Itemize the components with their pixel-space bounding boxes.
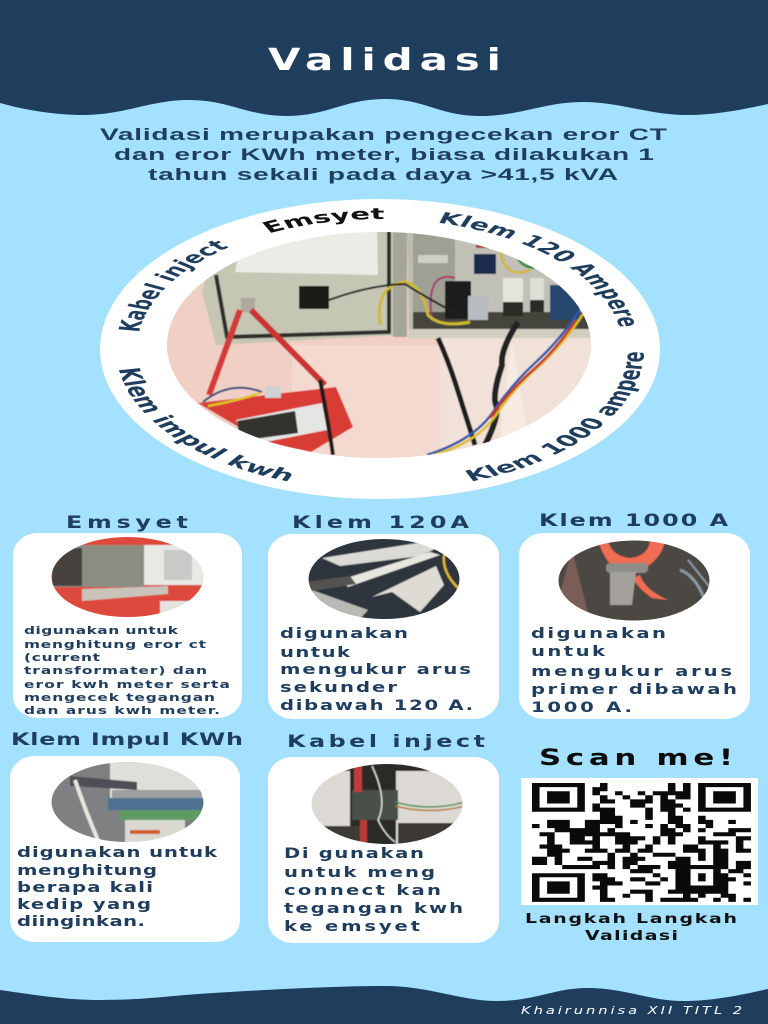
heading: Klem 120A: Klem 120A: [292, 512, 469, 532]
description text: [531, 626, 737, 716]
description text: digunakan untuk: [24, 625, 179, 637]
description text: tegangan kwh: [284, 901, 463, 917]
card background: [13, 533, 242, 718]
intro text: tahun sekali pada daya >41,5 kVA: [148, 165, 618, 184]
description text: connect kan: [284, 883, 441, 899]
panel: Klem 120A: [268, 512, 499, 719]
description text: digunakan: [280, 626, 408, 642]
intro text: dan eror KWh meter, biasa dilakukan 1: [114, 145, 654, 164]
description text: sekunder: [280, 680, 398, 696]
photo: inject cable: [310, 762, 466, 846]
QR code: [521, 778, 758, 905]
description text: kedip yang: [17, 897, 151, 913]
footer credit: Khairunnisa XII TITL 2: [521, 1005, 742, 1017]
description text: untuk: [531, 644, 606, 660]
description text: 1000 A.: [531, 700, 632, 716]
description text: transformater) dan: [24, 665, 207, 677]
header wave band: [0, 0, 768, 116]
description text: [284, 846, 463, 935]
description text: dibawah 120 A.: [280, 698, 473, 714]
ring label: Klem 1000 ampere: Klem 1000 ampere: [465, 352, 644, 482]
white ring: [100, 199, 660, 499]
description text: untuk meng: [284, 865, 435, 881]
ring label: Klem impul kwh: Klem impul kwh: [119, 368, 292, 482]
description text: mengecek tegangan: [24, 692, 215, 704]
description text: untuk: [280, 645, 351, 661]
description text: eror kwh meter serta: [24, 679, 230, 691]
panel: Klem 1000 A: [519, 510, 750, 719]
intro text: Validasi merupakan pengecekan eror CT: [100, 125, 667, 144]
card background: [10, 756, 240, 942]
heading: Emsyet: Emsyet: [66, 512, 188, 532]
card background: [268, 534, 499, 719]
description text: Di gunakan: [284, 846, 424, 862]
footer wave band: [0, 986, 768, 1024]
heading: Kabel inject: Kabel inject: [287, 731, 485, 751]
photo: clamp 120A: [305, 537, 463, 621]
card background: [268, 757, 499, 943]
description text: diinginkan.: [17, 914, 145, 930]
main photo: measuring equipment on panel: [160, 225, 600, 465]
description text: mengukur arus: [531, 664, 732, 680]
panel: Klem Impul KWh: [10, 729, 243, 942]
panel: Kabel inject: [268, 731, 499, 943]
ring label: Klem 120 Ampere: Klem 120 Ampere: [440, 212, 634, 326]
QR caption: [525, 911, 737, 943]
heading: Klem Impul KWh: Klem Impul KWh: [11, 729, 243, 749]
panel: Emsyet: [13, 512, 242, 718]
title: Validasi: [268, 42, 501, 77]
QR caption: Langkah Langkah: [525, 911, 737, 926]
heading: Klem 1000 A: Klem 1000 A: [539, 510, 728, 530]
photo: emsyet device: [50, 535, 206, 619]
description text: dan arus kwh meter.: [24, 705, 220, 717]
description text: [280, 626, 473, 714]
intro text: [100, 125, 667, 184]
photo: clamp 1000A: [556, 539, 712, 623]
description text: primer dibawah: [531, 682, 737, 698]
description text: mengukur arus: [280, 662, 471, 678]
heading: Scan me: Scan me!: [539, 745, 733, 771]
description text: digunakan untuk: [17, 845, 218, 861]
description text: (current: [24, 652, 101, 664]
photo: kWh meter with impulse clamp: [50, 760, 206, 845]
QR caption: Validasi: [585, 928, 678, 943]
card background: [519, 533, 750, 719]
ring label: Kabel inject: Kabel inject: [118, 240, 228, 332]
ring label: Emsyet: Emsyet: [262, 208, 384, 233]
panel: main circular photo with ring labels: [100, 199, 660, 499]
description text: berapa kali: [17, 880, 153, 896]
description text: menghitung: [17, 863, 157, 879]
description text: ke emsyet: [284, 919, 420, 935]
description text: [17, 845, 218, 930]
description text: [24, 625, 230, 717]
description text: menghitung eror ct: [24, 639, 207, 651]
description text: digunakan: [531, 626, 666, 642]
